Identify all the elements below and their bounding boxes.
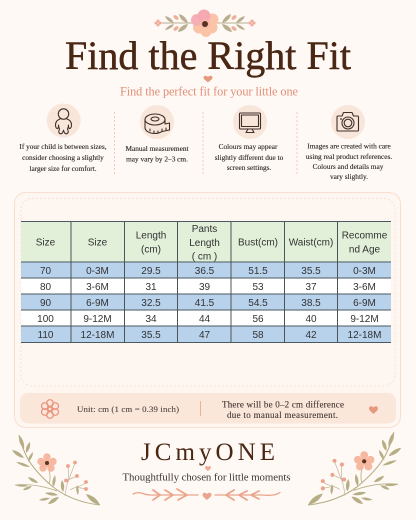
text: colour note: screen settings. <box>227 163 271 172</box>
table rows: 53 <box>252 282 264 293</box>
table rows: 37 <box>305 282 317 293</box>
panel: care notes <box>19 104 392 181</box>
callout: unit note <box>20 393 396 424</box>
text: sizing advice: consider choosing a slightly <box>22 153 104 162</box>
table rows: 41.5 <box>195 298 215 309</box>
table rows: 36.5 <box>195 266 215 277</box>
text: image note <box>306 142 392 181</box>
table rows: 12-18M <box>81 330 114 341</box>
table rows: 70 <box>40 266 51 277</box>
panel: size chart frame <box>14 192 400 428</box>
table rows: 110 <box>38 330 54 341</box>
table header: nd Age <box>349 244 381 256</box>
table header: Pants <box>192 224 217 235</box>
floral sprig left <box>12 435 100 505</box>
table rows: 34 <box>145 314 157 325</box>
table rows: 100 <box>37 314 54 325</box>
table header: Length <box>136 230 166 242</box>
table rows: 9-12M <box>350 314 379 325</box>
text: difference note <box>222 400 344 420</box>
icon: heart under title <box>204 76 212 82</box>
table rows: 0-3M <box>353 266 376 277</box>
icon: monitor <box>233 105 267 139</box>
text: colour note: Colours may appear <box>219 142 278 151</box>
table rows: 51.5 <box>248 266 268 277</box>
subtitle: Find the perfect fit for your little one <box>120 84 299 98</box>
table rows: 3-6M <box>353 282 376 293</box>
text: difference note: There will be 0–2 cm difference <box>222 400 344 410</box>
table rows: 35.5 <box>141 330 161 341</box>
table rows: 6-9M <box>353 298 376 309</box>
arrow ornament <box>133 489 280 500</box>
icon: camera <box>331 105 365 139</box>
icon: small heart <box>205 466 211 471</box>
table rows: 32.5 <box>141 298 161 309</box>
table rows: 90 <box>40 298 51 309</box>
size table <box>21 221 391 343</box>
table rows: 6-9M <box>86 298 109 309</box>
table rows: 35.5 <box>301 266 321 277</box>
text: colour note: slightly different due to <box>215 153 284 162</box>
table rows: 40 <box>305 314 317 325</box>
text: unit: Unit: cm (1 cm = 0.39 inch) <box>77 404 179 414</box>
text: manual measurement: Manual measurement <box>125 144 189 153</box>
table rows: 3-6M <box>86 282 109 293</box>
icon: flower outline <box>42 400 58 418</box>
table rows: 38.5 <box>301 298 321 309</box>
text: sizing advice: If your child is between sizes, <box>19 142 107 151</box>
floral sprig right <box>308 432 401 505</box>
text: manual measurement <box>125 144 189 164</box>
text: image note: Colours and details may <box>313 162 384 171</box>
table rows: 54.5 <box>248 298 268 309</box>
floral ornament top <box>154 10 256 37</box>
tagline: Thoughtfully chosen for little moments <box>122 472 290 484</box>
text: difference note: due to manual measurement. <box>227 410 338 420</box>
icon: heart <box>369 406 378 414</box>
table rows: 9-12M <box>83 314 112 325</box>
table rows: 0-3M <box>86 266 109 277</box>
table rows: 42 <box>305 330 317 341</box>
table header: Length <box>189 238 220 249</box>
table rows <box>37 266 381 341</box>
table header: (cm) <box>141 244 161 256</box>
table header: Size <box>88 238 108 248</box>
icon: baby <box>47 104 81 138</box>
title: Find the Right Fit <box>65 33 351 78</box>
text: sizing advice <box>19 142 107 173</box>
table rows: 47 <box>199 330 210 341</box>
icon: measuring tape <box>140 105 174 139</box>
table rows: 80 <box>40 282 51 293</box>
table header: Waist(cm) <box>289 238 333 248</box>
text: image note: Images are created with care <box>307 142 391 150</box>
table rows: 39 <box>199 282 210 293</box>
text: image note: vary slightly. <box>330 172 368 181</box>
brand name: JCmyONE <box>141 439 275 466</box>
text: sizing advice: larger size for comfort. <box>29 164 97 173</box>
text: image note: using real product references. <box>306 152 392 161</box>
table rows: 31 <box>145 282 157 293</box>
table rows: 12-18M <box>348 330 381 341</box>
table header: Recomme <box>342 230 388 242</box>
table rows: 44 <box>199 314 210 325</box>
table header: Size <box>36 238 56 248</box>
table rows: 56 <box>252 314 264 325</box>
text: colour note <box>215 142 284 172</box>
text: manual measurement: may vary by 2–3 cm. <box>126 154 188 164</box>
table header <box>36 224 388 262</box>
table rows: 58 <box>252 330 264 341</box>
table header: ( cm ) <box>192 252 217 262</box>
table header: Bust(cm) <box>238 238 278 248</box>
table rows: 29.5 <box>141 266 161 277</box>
